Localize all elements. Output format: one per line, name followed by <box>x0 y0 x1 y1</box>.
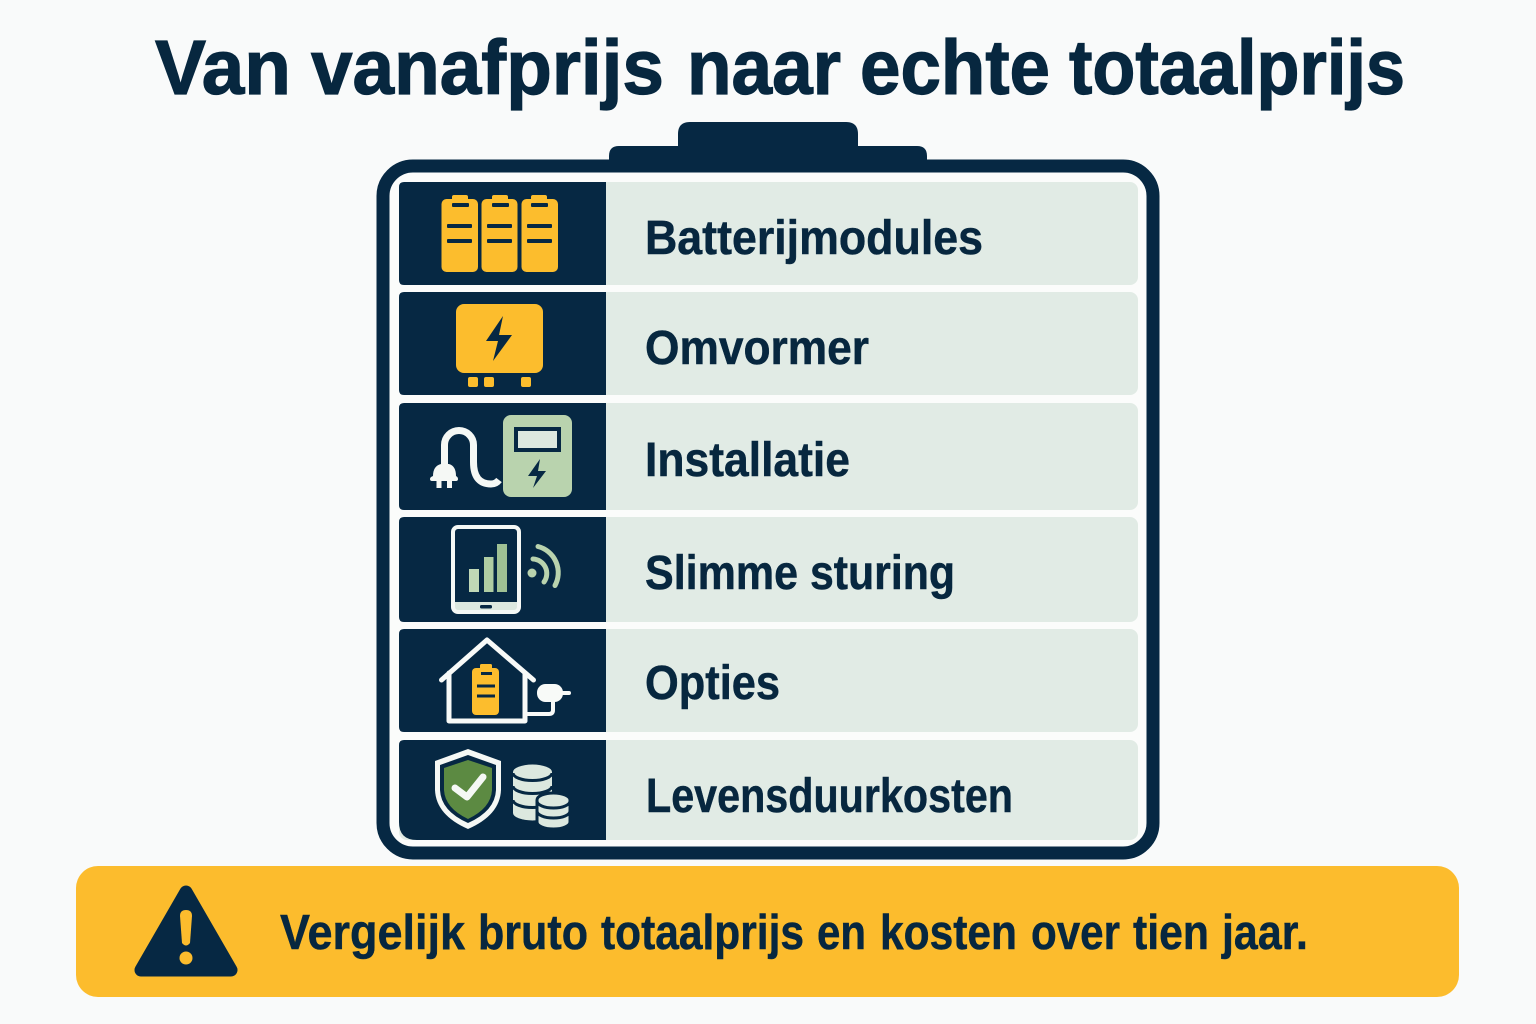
battery terminal <box>609 122 927 161</box>
row: Opties <box>399 629 1138 732</box>
label: Slimme sturing <box>645 547 955 600</box>
title: naar <box>687 25 841 111</box>
icon: tablet with signal <box>453 527 558 613</box>
label: Installatie: Installatie <box>645 434 850 487</box>
callout text: tien <box>1133 906 1209 960</box>
icon: warning triangle <box>141 892 231 970</box>
title: vanafprijs <box>311 25 664 111</box>
label: Slimme sturing: Slimme <box>645 547 798 600</box>
label: Opties: Opties <box>645 657 780 710</box>
row: Levensduurkosten <box>399 740 1138 840</box>
row: Omvormer <box>399 292 1138 395</box>
callout text: totaalprijs <box>601 906 804 960</box>
label: Levensduurkosten: Levensduurkosten <box>646 770 1013 823</box>
panel: battery-shaped cost stack <box>383 122 1153 853</box>
icon: plug and meter <box>430 415 572 497</box>
label: Slimme sturing: sturing <box>810 547 955 600</box>
callout text: Vergelijk <box>280 906 466 960</box>
title: totaalprijs <box>1069 25 1405 111</box>
title: echte <box>860 25 1050 111</box>
callout banner <box>76 866 1459 997</box>
row: Slimme sturing <box>399 517 1138 622</box>
icon: inverter <box>456 304 543 387</box>
label: Omvormer: Omvormer <box>645 322 869 375</box>
callout text: en <box>817 906 866 960</box>
row: Batterijmodules <box>399 182 1138 285</box>
icon: house with battery and plug <box>442 640 571 721</box>
icon: battery modules <box>442 195 558 272</box>
callout text: over <box>1031 906 1120 960</box>
label: Batterijmodules: Batterijmodules <box>645 212 983 265</box>
callout text: jaar. <box>1221 906 1308 960</box>
row: Installatie <box>399 403 1138 510</box>
callout text <box>280 906 1308 960</box>
callout text: bruto <box>478 906 588 960</box>
icon: shield with check <box>435 749 501 829</box>
title <box>155 25 1405 111</box>
battery frame <box>383 166 1153 853</box>
callout text: kosten <box>880 906 1017 960</box>
title: Van <box>155 25 291 111</box>
icon: coin stacks <box>513 765 570 829</box>
